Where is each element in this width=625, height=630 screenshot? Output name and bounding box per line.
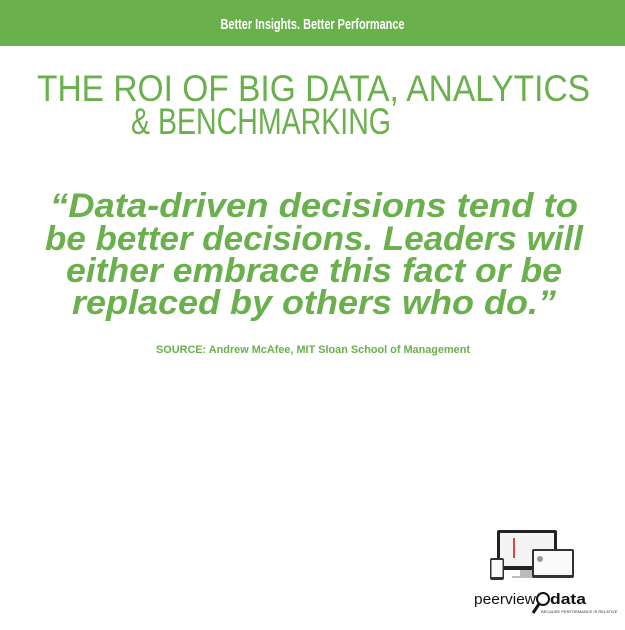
logo: peerview data: data — [550, 591, 587, 608]
title: & BENCHMARKING — [131, 101, 391, 142]
quote: either embrace this fact or be — [66, 252, 562, 290]
logo: peerview data: BECAUSE PERFORMANCE IS RELATIVE — [541, 609, 618, 614]
quote: “Data-driven decisions tend to — [50, 187, 578, 225]
quote: replaced by others who do.” — [72, 284, 556, 322]
source: SOURCE: Andrew McAfee, MIT Sloan School of Management — [156, 344, 470, 356]
title — [37, 68, 590, 142]
logo text: peerview — [474, 591, 536, 608]
quote: be better decisions. Leaders will — [45, 220, 585, 258]
icon: devices — [490, 530, 574, 580]
header tagline: Better Insights. Better Performance — [220, 16, 404, 33]
quote — [45, 187, 585, 322]
logo: peerview data — [474, 530, 618, 614]
header bar — [0, 0, 625, 46]
